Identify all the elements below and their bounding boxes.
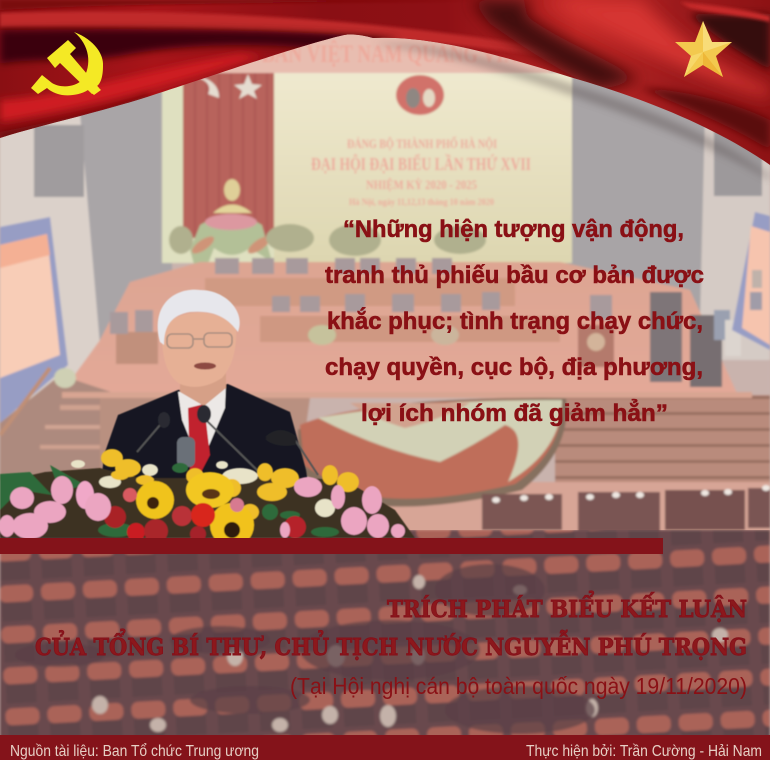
quote text: tranh thủ phiếu bầu cơ bản được (325, 262, 704, 289)
shirt collar (178, 384, 226, 452)
portrait medallion (396, 75, 444, 115)
bright fold left (0, 54, 262, 122)
quote text: khắc phục; tình trạng chạy chức, (327, 307, 703, 335)
stage backdrop (162, 73, 572, 263)
quote text: chạy quyền, cục bộ, địa phương, (325, 354, 703, 381)
suit jacket (100, 384, 310, 495)
delegate tables with cups (482, 485, 770, 532)
top right streak (680, 2, 770, 22)
sunflowers (136, 472, 254, 547)
quote text (325, 216, 704, 427)
microphones (137, 405, 318, 475)
head table and delegates (110, 258, 614, 367)
cream blooms (71, 460, 335, 517)
bright fold right (545, 0, 770, 98)
right steps (555, 395, 770, 483)
flower mound (298, 398, 567, 507)
burgundy divider bar (0, 538, 663, 554)
quote text: lợi ích nhóm đã giảm hẳn” (361, 398, 668, 427)
ribbon shading folds (0, 0, 770, 150)
pink orchids (0, 476, 405, 539)
audience seating (0, 530, 770, 740)
cameramen group (650, 292, 741, 387)
palm leaves (0, 463, 339, 537)
side pillars (0, 100, 770, 410)
palms (169, 224, 486, 256)
dark top strip (0, 0, 366, 10)
left projection screen (0, 217, 68, 423)
hammer (47, 40, 99, 94)
quote text: “Những hiện tượng vận động, (343, 216, 684, 243)
dark grey stage wings (34, 70, 762, 345)
red tie (188, 404, 210, 478)
heading (35, 590, 747, 661)
right projection screen (732, 212, 770, 350)
dark fold right centre (470, 0, 640, 90)
dark lower left edge (0, 94, 150, 144)
footer band: Nguồn tài liệu: Ban Tổ chức Trung ương (10, 742, 259, 760)
backdrop congress text: NHIỆM KỲ 2020 - 2025 (366, 177, 477, 192)
yellow blooms (101, 449, 359, 520)
face (162, 312, 236, 387)
dark lower right fold (640, 88, 770, 150)
light band upper left (0, 10, 530, 52)
sickle blade (31, 32, 103, 95)
stage floor (60, 262, 740, 400)
speaker portrait (100, 290, 318, 495)
dark fold left (0, 29, 400, 64)
ribbon body (0, 0, 770, 165)
backdrop congress text: Hà Nội, ngày 11,12,13 tháng 10 năm 2020 (349, 198, 494, 208)
backdrop congress text (311, 136, 531, 208)
backdrop congress text: ĐẢNG BỘ THÀNH PHỐ HÀ NỘI (347, 136, 497, 151)
mouth (194, 362, 216, 370)
emblem: hammer, sickle and star on curtain (198, 74, 262, 99)
ribbon shadow (373, 43, 770, 180)
foliage base (0, 468, 415, 538)
left staircase (0, 368, 120, 480)
bust and flower arch (189, 179, 273, 285)
footer band (0, 735, 770, 760)
banner with slogan (200, 30, 550, 74)
flower arrangement (0, 449, 415, 547)
neck (180, 366, 226, 406)
banner with slogan: BAN VIỆT NAM QUANG VINH (262, 40, 532, 68)
front floor and stage edge (62, 392, 770, 542)
glasses (167, 333, 232, 348)
icon: gold star (675, 21, 732, 77)
icon: hammer and sickle (31, 32, 103, 95)
red flag ribbon (0, 0, 770, 180)
backdrop congress text: ĐẠI HỘI ĐẠI BIỂU LẦN THỨ XVII (311, 154, 531, 174)
dark fold far right (690, 14, 770, 70)
red roses (104, 488, 306, 543)
white hair (158, 290, 240, 345)
